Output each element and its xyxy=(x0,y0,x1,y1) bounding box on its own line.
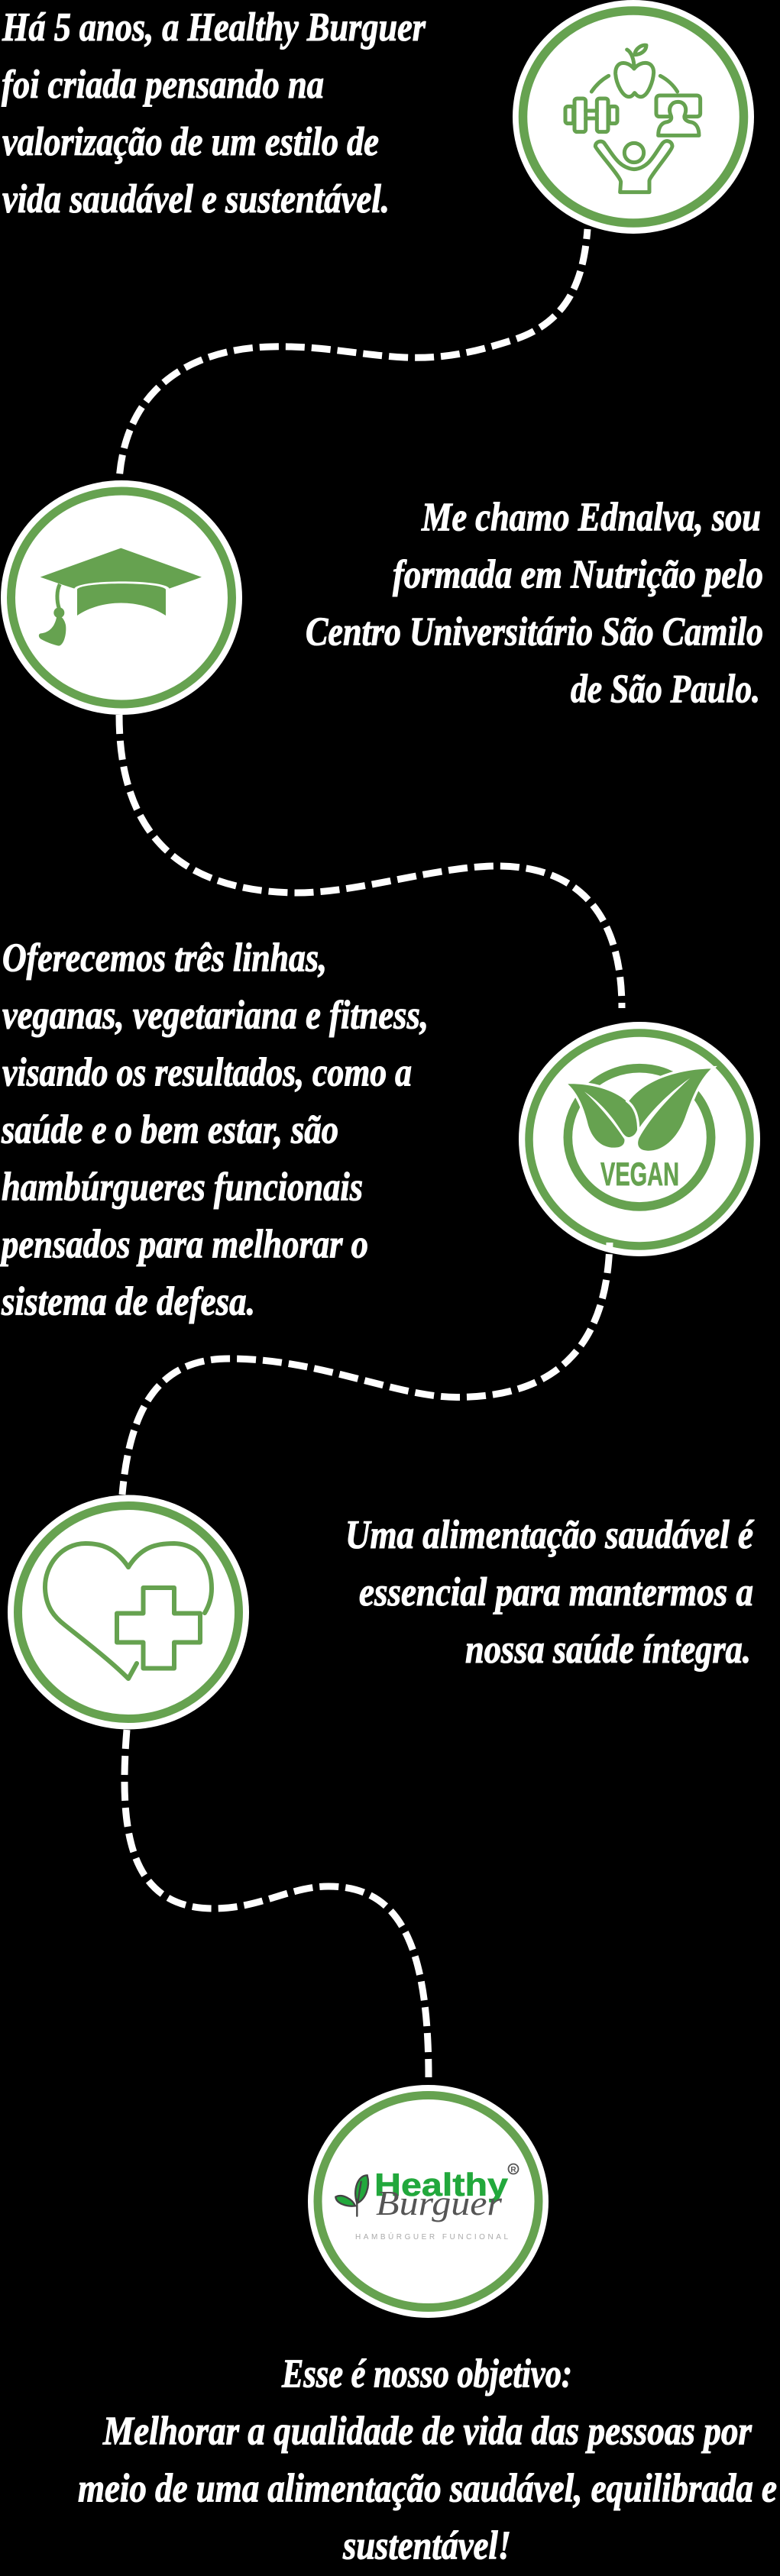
intro text block: vida saudável e sustentável. xyxy=(2,177,390,221)
text block: product lines: saúde e o bem estar, são xyxy=(1,1107,338,1152)
logo badge: Healthy Burguer xyxy=(308,2085,549,2318)
intro text block xyxy=(2,5,426,221)
text block: product lines xyxy=(0,936,429,1324)
text block: healthy food xyxy=(345,1513,754,1672)
closing text block xyxy=(78,2352,777,2568)
text block: product lines: sistema de defesa. xyxy=(1,1280,255,1324)
dashed connector 4 xyxy=(125,1730,429,2077)
dashed connector 2 xyxy=(119,715,622,1008)
text block: product lines: hambúrgueres funcionais xyxy=(2,1165,363,1210)
logo badge: Healthy Burguer: Burguer xyxy=(376,2183,503,2222)
intro text block: valorização de um estilo de xyxy=(2,120,379,164)
intro text block: foi criada pensando na xyxy=(2,63,324,107)
closing text block: Esse é nosso objetivo: xyxy=(281,2352,572,2397)
icon: vegan badge: VEGAN xyxy=(600,1156,679,1193)
text block: product lines: pensados para melhorar o xyxy=(0,1222,368,1266)
icon: vegan badge xyxy=(519,1022,760,1256)
logo badge: Healthy Burguer: HAMBÚRGUER FUNCIONAL xyxy=(355,2232,508,2241)
icon: healthy lifestyle badge xyxy=(513,0,754,234)
text block: product lines: visando os resultados, como a xyxy=(2,1051,412,1095)
closing text block: sustentável! xyxy=(342,2523,511,2568)
dashed connector 1 xyxy=(119,229,587,480)
icon: graduation cap badge xyxy=(1,480,242,715)
logo badge: Healthy Burguer: R xyxy=(510,2166,516,2174)
dashed connector 3 xyxy=(122,1243,610,1495)
text block: Ednalva xyxy=(306,495,763,712)
icon: heart with cross badge xyxy=(8,1495,249,1729)
intro text block: Há 5 anos, a Healthy Burguer xyxy=(2,5,426,50)
text block: product lines: veganas, vegetariana e fitness, xyxy=(2,993,429,1037)
text block: product lines: Oferecemos três linhas, xyxy=(2,936,327,981)
logo badge: Healthy Burguer: Healthy xyxy=(374,2167,509,2203)
